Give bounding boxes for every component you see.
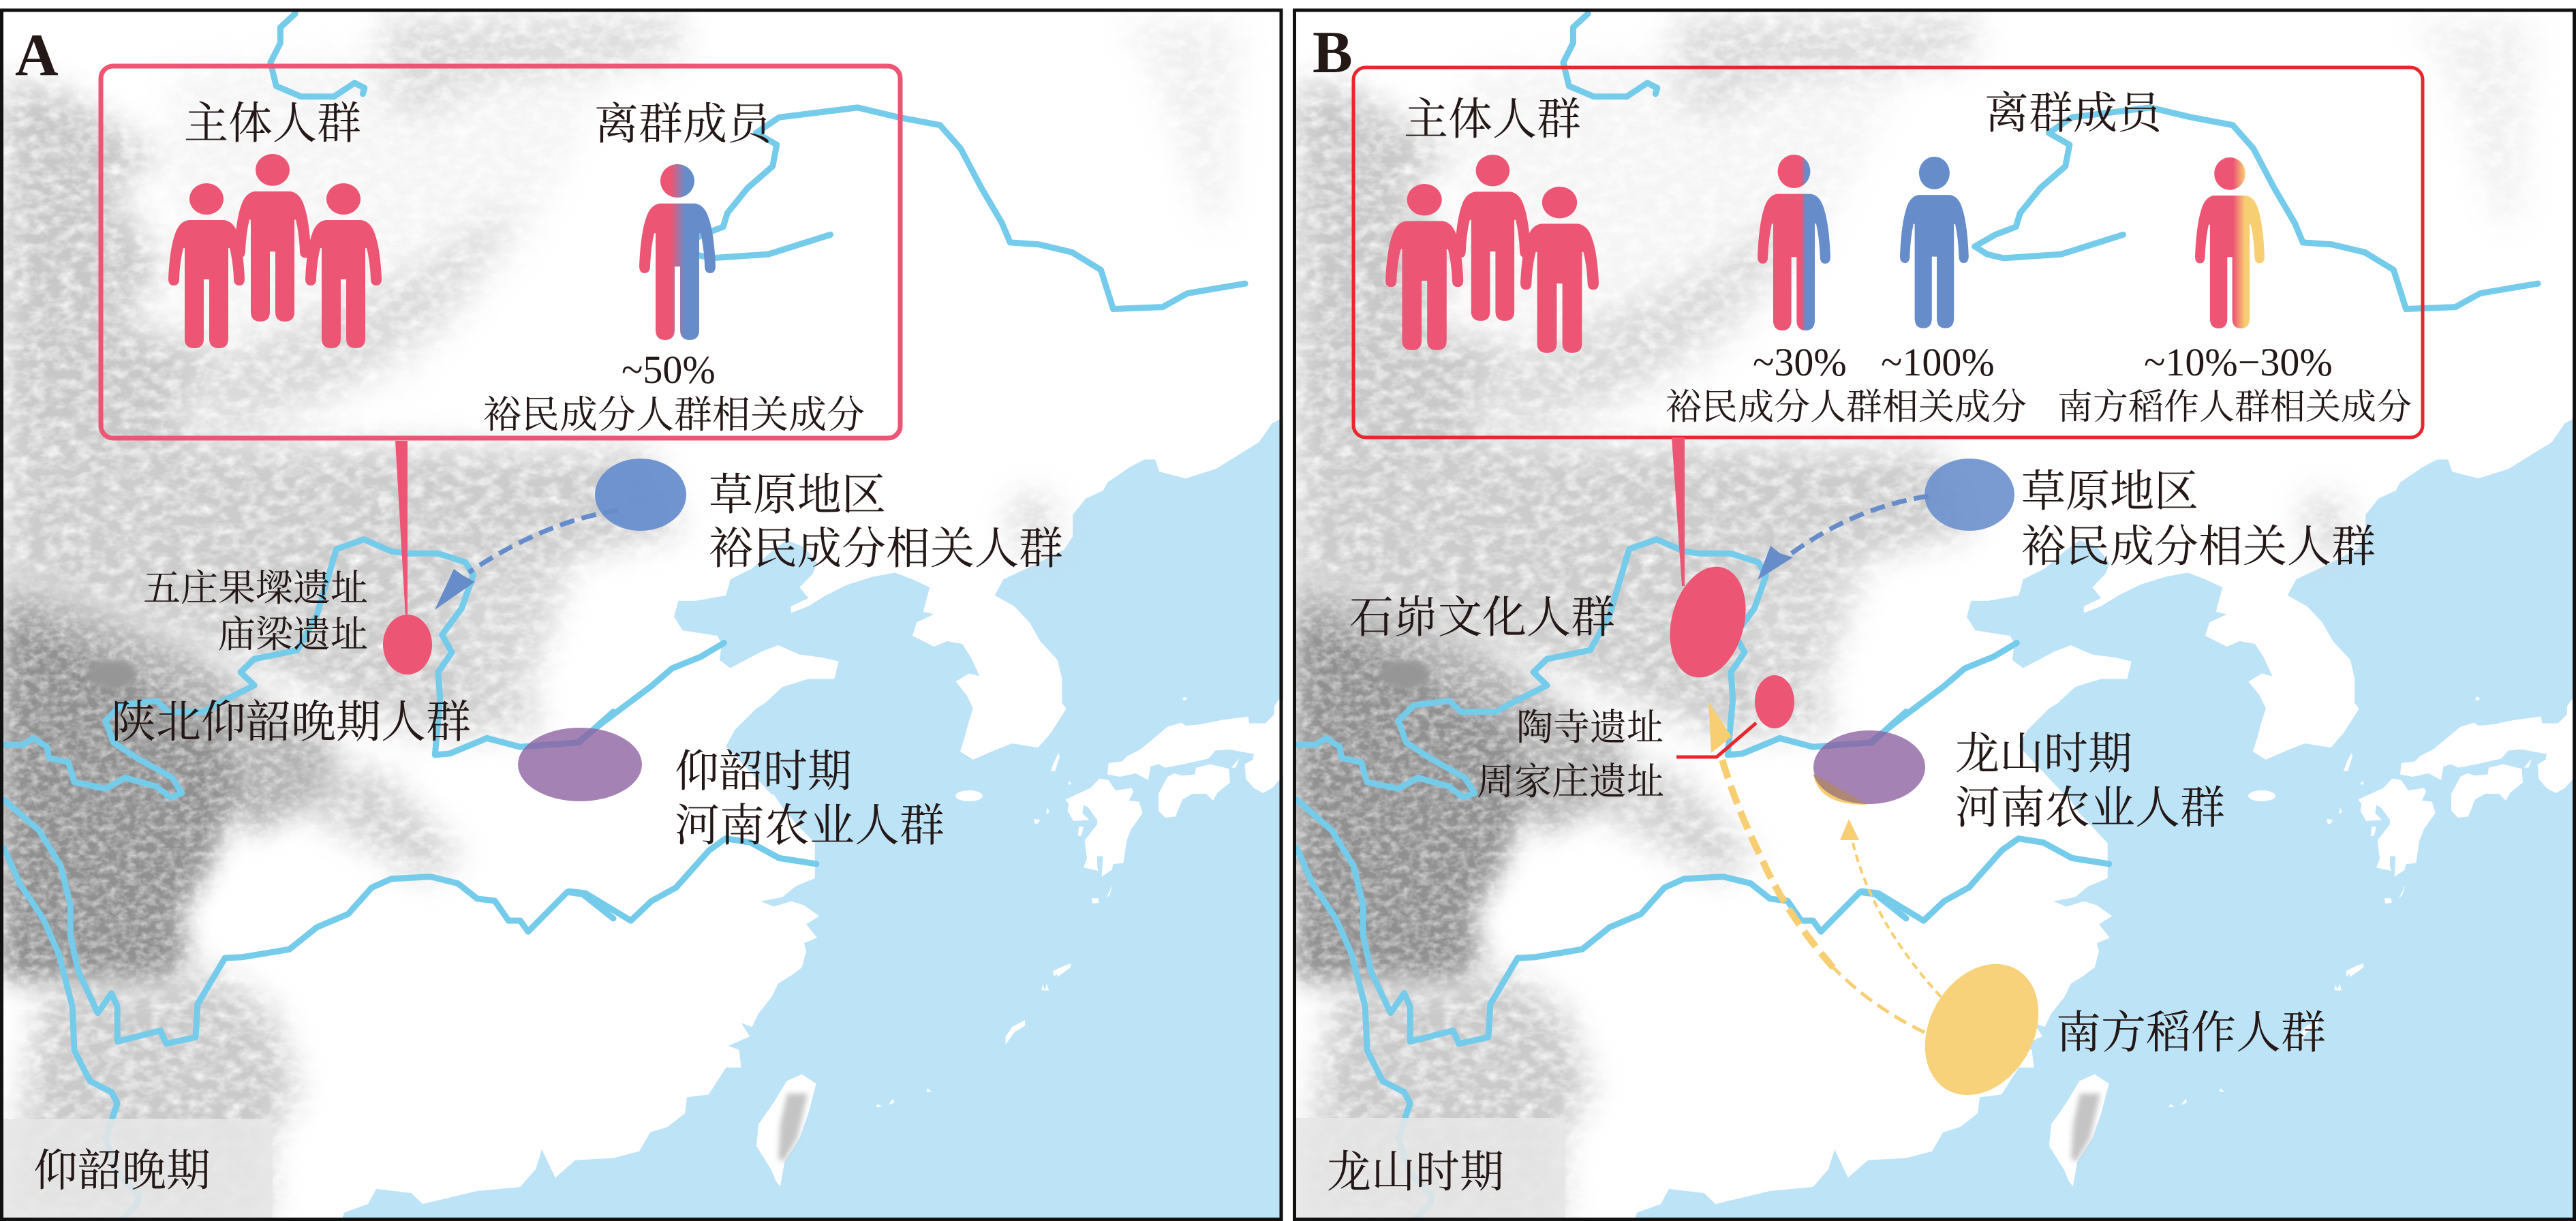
percentages: ~100% bbox=[1881, 340, 1995, 384]
blue ellipse: steppe group bbox=[1925, 459, 2014, 531]
panel letter B: B bbox=[1313, 20, 1353, 86]
label: Henan farmers bbox=[675, 747, 945, 851]
panel letter A: A bbox=[15, 22, 59, 89]
heading: outliers: 离群成员 bbox=[1984, 89, 2165, 138]
percentages: ~10%−30% bbox=[2144, 340, 2333, 384]
red leader line bbox=[1676, 723, 1756, 757]
icon: outlier half steppe bbox=[639, 164, 716, 340]
percentages: ~30% bbox=[1753, 340, 1847, 384]
blue ellipse: steppe group bbox=[595, 459, 686, 531]
percentages bbox=[1753, 340, 2333, 384]
yellow crescent under purple bbox=[1813, 774, 1867, 805]
label: Taosi: 陶寺遗址 bbox=[1516, 707, 1663, 748]
label: Henan farmers: 河南农业人群 bbox=[1955, 784, 2225, 833]
label: Shimao group: 石峁文化人群 bbox=[1349, 593, 1615, 643]
callout box B bbox=[1353, 67, 2423, 437]
arrow: steppe to Shaanxi bbox=[435, 510, 618, 610]
label: Henan farmers: 河南农业人群 bbox=[675, 801, 945, 851]
label: sites: 庙梁遗址 bbox=[218, 614, 368, 655]
pointer from callout to Shimao bbox=[1672, 437, 1685, 586]
label: southern rice group: 南方稻作人群 bbox=[2056, 1008, 2326, 1058]
red ellipse: Shimao group bbox=[1658, 558, 1758, 686]
label: sites bbox=[143, 568, 368, 655]
period label box B bbox=[1296, 1118, 1565, 1218]
label: steppe group bbox=[2021, 467, 2376, 572]
arrow: rice group to Taosi bbox=[1722, 760, 1925, 1032]
panel B: Longshan map bbox=[1293, 0, 2576, 1221]
base map A bbox=[0, 0, 1288, 1221]
panel A: late Yangshao map bbox=[0, 0, 1288, 1221]
label: Henan farmers bbox=[1955, 730, 2225, 833]
label: Henan farmers: 仰韶时期 bbox=[675, 747, 852, 797]
icon: three main group people bbox=[168, 154, 382, 348]
base map B bbox=[1293, 0, 2576, 1221]
period label box A: 仰韶晚期 bbox=[33, 1147, 211, 1196]
icon: outlier 100 percent bbox=[1900, 157, 1969, 328]
heading: outliers: 离群成员 bbox=[594, 100, 775, 149]
icon: three main group people bbox=[1385, 155, 1599, 353]
label: sites: 五庄果墚遗址 bbox=[143, 568, 368, 609]
label: steppe group: 裕民成分相关人群 bbox=[709, 525, 1063, 574]
icon: outlier southern rice bbox=[2195, 157, 2265, 328]
red ellipse: northern Shaanxi group bbox=[383, 615, 432, 675]
ancestry label: steppe: 裕民成分人群相关成分 bbox=[1666, 388, 2027, 427]
callout box A bbox=[101, 66, 900, 438]
label: steppe group: 草原地区 bbox=[2021, 467, 2198, 516]
label: Zhoujiazhuang: 周家庄遗址 bbox=[1477, 761, 1664, 803]
icon: outlier 30 percent bbox=[1758, 155, 1830, 330]
ancestry label: 裕民成分人群相关成分 bbox=[483, 395, 865, 437]
label: Henan farmers: 龙山时期 bbox=[1955, 730, 2132, 779]
period label box A bbox=[3, 1119, 273, 1218]
label: steppe group: 草原地区 bbox=[709, 471, 886, 520]
yellow wedge pointer bbox=[1708, 702, 1732, 753]
label: steppe group: 裕民成分相关人群 bbox=[2021, 523, 2376, 572]
red ellipse: Taosi and Zhoujiazhuang bbox=[1755, 675, 1794, 728]
purple ellipse: Henan farmers bbox=[1813, 730, 1925, 804]
label: steppe group bbox=[709, 471, 1063, 574]
label: northern Shaanxi group: 陕北仰韶晚期人群 bbox=[111, 698, 471, 747]
arrow: rice group to Henan bbox=[1840, 819, 1941, 997]
frame of panel A bbox=[1, 10, 1281, 1220]
purple ellipse: Henan farmers bbox=[518, 728, 642, 801]
percentage label: ~50% bbox=[622, 347, 716, 392]
pointer from callout to site bbox=[395, 441, 408, 617]
ancestry label: rice: 南方稻作人群相关成分 bbox=[2057, 388, 2412, 427]
overlap wedge bbox=[1813, 774, 1867, 804]
yellow ellipse: southern rice group bbox=[1902, 944, 2061, 1115]
arrow: steppe to Shimao bbox=[1758, 496, 1929, 580]
frame of panel B bbox=[1295, 10, 2575, 1220]
period label box B: 龙山时期 bbox=[1327, 1148, 1504, 1197]
heading: main group: 主体人群 bbox=[184, 99, 361, 149]
heading: main group: 主体人群 bbox=[1404, 95, 1581, 144]
